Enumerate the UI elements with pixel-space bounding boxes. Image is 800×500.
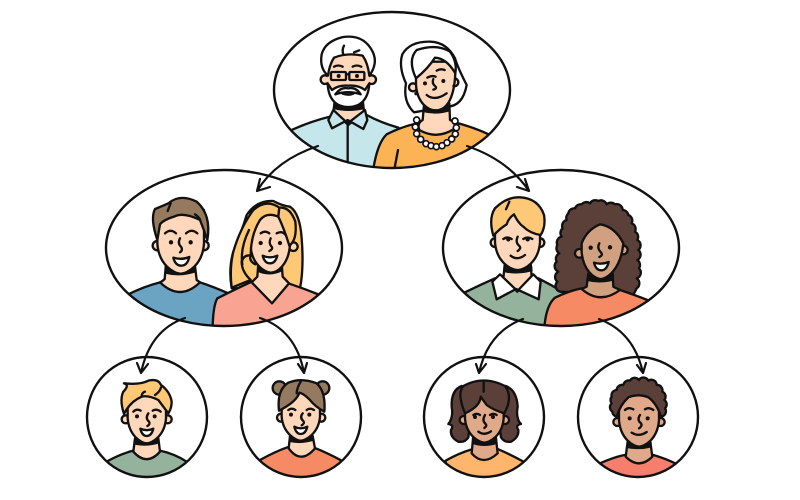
node: girl with pigtails — [424, 357, 544, 483]
node: right couple — [443, 170, 679, 332]
woman in pink t-shirt — [213, 201, 320, 332]
man in green sweater — [465, 197, 565, 325]
arrow: right couple to girl with pigtails — [476, 319, 523, 373]
arrow: left couple to girl with buns — [260, 318, 307, 373]
node: girl with buns — [241, 357, 361, 483]
grandfather — [292, 37, 398, 175]
arrow: left couple to blond boy — [137, 318, 185, 373]
node: grandparents — [274, 12, 510, 175]
arrow: grandparents to right couple — [467, 146, 529, 191]
man in blue t-shirt — [128, 198, 228, 332]
family tree diagram — [86, 10, 700, 478]
arrow: grandparents to left couple — [257, 146, 318, 191]
pearl necklace — [412, 117, 459, 150]
arrow: right couple to curly-haired boy — [599, 319, 646, 373]
grandmother — [373, 42, 490, 175]
woman with curly hair — [545, 200, 647, 332]
node: boy with curly hair — [578, 357, 698, 483]
node: left couple — [106, 170, 342, 332]
node: blond boy — [87, 357, 207, 483]
